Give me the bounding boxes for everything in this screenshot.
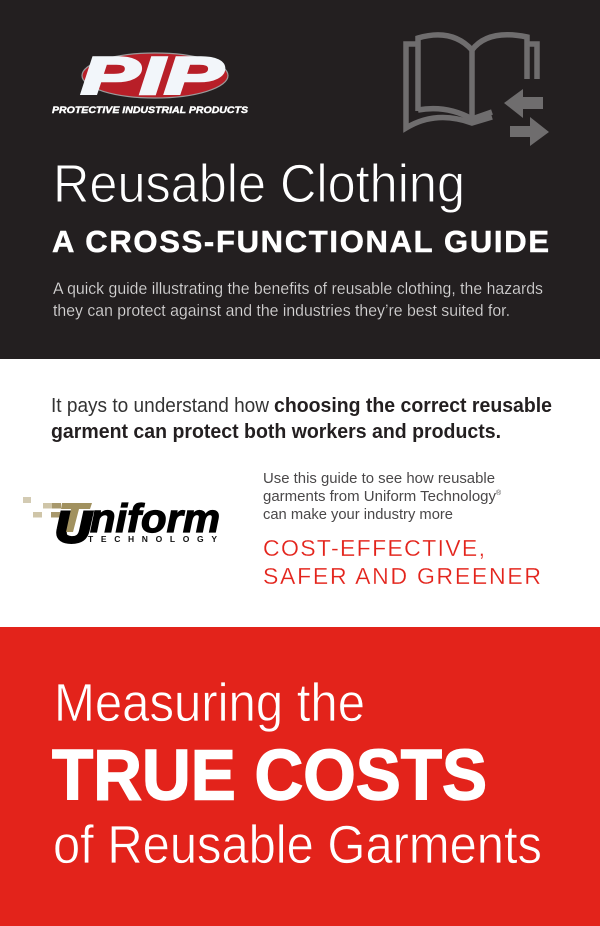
- title: Reusable Clothing: [53, 154, 465, 214]
- panel: white middle section: [0, 359, 600, 627]
- logo: Uniform Technology: TECHNOLOGY: [88, 534, 217, 544]
- panel: dark header: [0, 0, 600, 359]
- red callout: SAFER AND GREENER: [263, 563, 541, 589]
- logo: Uniform Technology: niform: [90, 497, 220, 541]
- lead statement: [51, 395, 552, 443]
- guide description: Use this guide to see how reusable: [263, 471, 495, 487]
- logo: Uniform Technology: [23, 497, 220, 552]
- lead statement: choosing the correct reusable: [274, 395, 552, 417]
- red callout: [263, 535, 541, 589]
- subtitle: A CROSS-FUNCTIONAL GUIDE: [52, 224, 549, 259]
- panel: red true costs section: [0, 627, 600, 926]
- lead statement: It pays to understand how: [51, 395, 270, 417]
- logo: PIP: [52, 47, 249, 116]
- guide description: ®: [496, 489, 502, 497]
- heading line: TRUE COSTS: TRUE COSTS: [52, 736, 487, 816]
- guide description: garments from Uniform Technology: [263, 489, 497, 505]
- heading line: Measuring the: Measuring the: [54, 673, 365, 733]
- logo: PIP: PROTECTIVE INDUSTRIAL PRODUCTS: [52, 105, 249, 116]
- lead statement: garment can protect both workers and products.: [51, 421, 501, 443]
- guide description: can make your industry more: [263, 507, 453, 523]
- intro text: [53, 280, 543, 320]
- heading line: of Reusable Garments: of Reusable Garments: [53, 815, 542, 875]
- intro text: A quick guide illustrating the benefits of reusable clothing, the hazards: [53, 280, 543, 298]
- intro text: they can protect against and the industries they’re best suited for.: [53, 302, 510, 320]
- logo: PIP: PIP: [81, 47, 224, 106]
- guide description: [263, 471, 502, 523]
- icon: open book with exchange arrows: [406, 35, 549, 146]
- logo: Uniform Technology: U: [55, 503, 92, 552]
- red callout: COST-EFFECTIVE,: [263, 535, 485, 561]
